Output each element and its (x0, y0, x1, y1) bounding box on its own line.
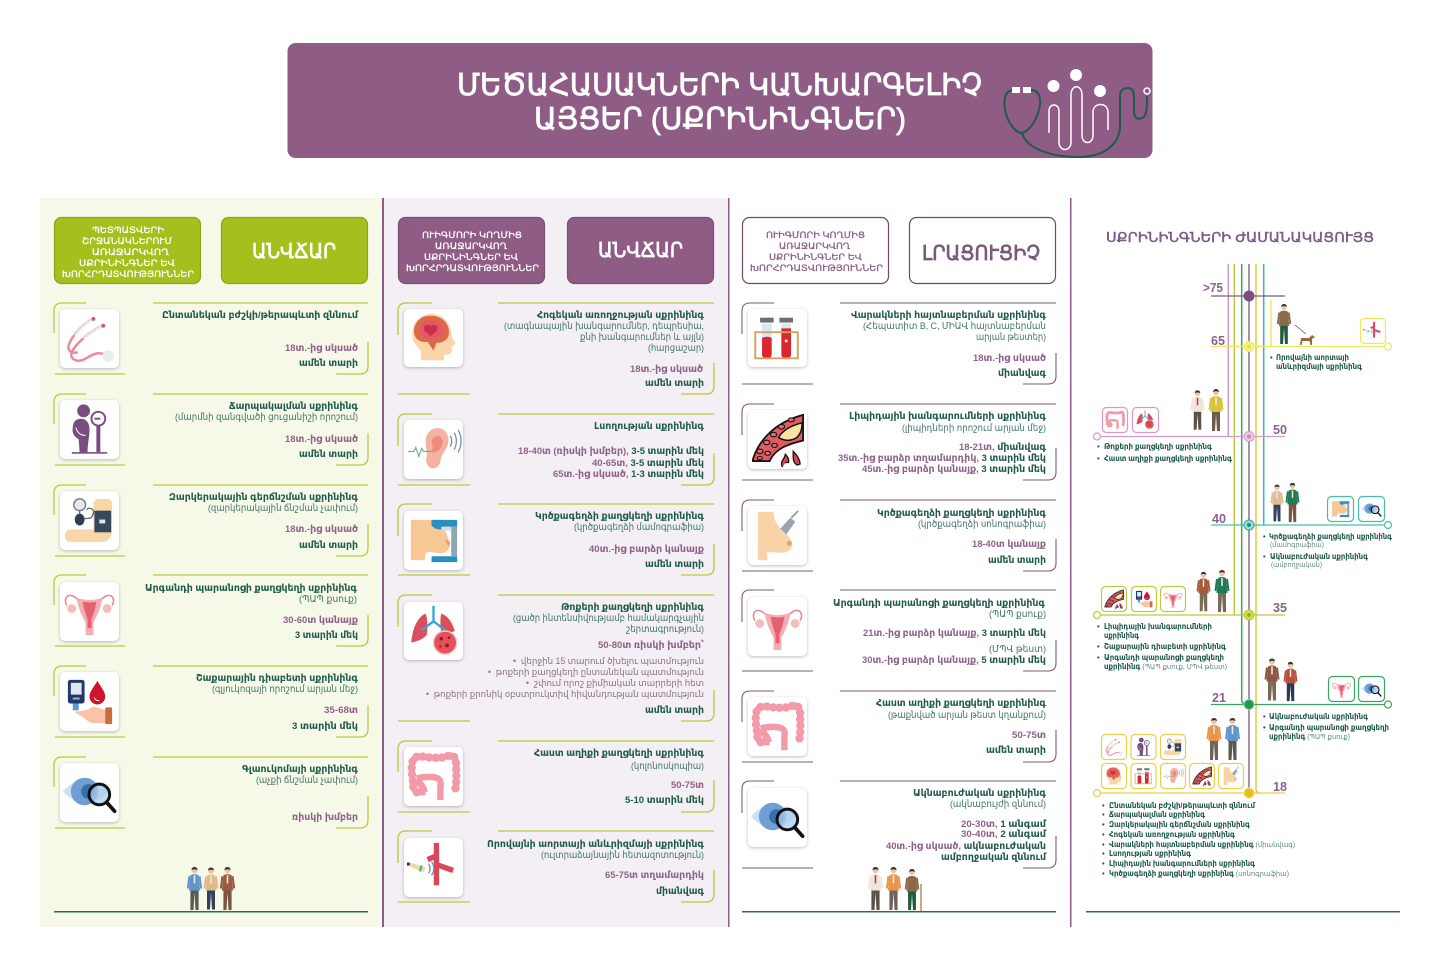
heading box: WHO recommended: ՍՔՐԻՆԻՆԳՆԵՐ ԵՎ (769, 252, 862, 262)
list: age 35 screenings: սքրինինգ (1104, 631, 1140, 640)
heading box: additional: ԼՐԱՑՈՒՑԻՉ (922, 243, 1040, 265)
text: breast cancer mammography: 40տ.-ից բարձր կանայք (589, 544, 704, 555)
icon: eye with magnifier (748, 788, 807, 847)
milestone: age 21 (1211, 658, 1392, 741)
list: age 35 screenings (1097, 622, 1227, 671)
text: family doctor exam (162, 310, 359, 369)
row: breast ultrasound (742, 500, 1056, 571)
heading box: state programs: ՊԵՏՊԱՏՎԵՐԻ (92, 225, 164, 235)
milestone: age 40: 40 (1212, 512, 1226, 526)
heading box: free: ԱՆՎՃԱՐ (252, 241, 336, 263)
text: abdominal aortic aneurysm: Որովայնի աորտայի անևրիզմայի սքրինինգ (487, 839, 704, 850)
text: abdominal aortic aneurysm: 65-75տ տղամարդիկ (605, 870, 704, 881)
text: ophthalmology: (ակնաբույժի զննում) (950, 798, 1046, 809)
milestone: age 50 (1094, 389, 1287, 463)
row: family doctor exam (54, 303, 368, 374)
icon: mammography box (1328, 496, 1354, 522)
text: diabetes: 3 տարին մեկ (292, 721, 358, 732)
milestone: over 75 (1203, 281, 1285, 302)
text: mental health: (տագնապային խանգարումներ, դեպրեսիա, (504, 320, 704, 331)
icon: blood pressure cuff (60, 491, 119, 550)
panel: header banner (288, 43, 1152, 158)
text: diabetes (196, 673, 358, 732)
list: age 18 screenings: • (1102, 820, 1105, 829)
chart: timeline vertical lines (1228, 264, 1271, 793)
text: colon cancer stool test: Հաստ աղիքի քաղցկեղի սքրինինգ (876, 698, 1046, 709)
icon: eye box (1358, 676, 1384, 702)
text: colon cancer stool test: ամեն տարի (986, 745, 1046, 756)
text: cervical cancer additional (833, 598, 1046, 666)
list: age 50 screenings: Թոքերի քաղցկեղի սքրինինգ (1104, 442, 1213, 451)
list: age 35 screenings: • (1097, 653, 1100, 662)
list: age 18 screenings: Ընտանեկան բժշկի/թերապևտի զննում (1109, 801, 1256, 810)
text: ophthalmology: 20-30տ, 1 անգամ (961, 819, 1047, 830)
icon: blood test tubes (748, 309, 807, 367)
text: colon cancer colonoscopy: Հաստ աղիքի քաղցկեղի սքրինինգ (534, 748, 704, 759)
text: abdominal aortic aneurysm (487, 839, 704, 897)
text: colon cancer stool test: (թաքնված արյան թեստ կղանքում) (888, 709, 1046, 720)
title: ՄԵԾԱՀԱՍԱԿՆԵՐԻ ԿԱՆԽԱՐԳԵԼԻՉ (457, 69, 982, 102)
row: cervical cancer (54, 575, 368, 646)
text: lipid disorders: 35տ.-ից բարձր տղամարդիկ, 3 տարին մեկ (838, 453, 1046, 464)
row: lipid disorders (742, 404, 1056, 480)
list: age 65 screenings (1270, 353, 1363, 371)
text: colon cancer colonoscopy: (կոլոնոսկոպիա) (631, 760, 704, 771)
list: age 21 screenings: • (1263, 723, 1266, 732)
text: hearing: 40-65տ, 3-5 տարին մեկ (592, 458, 704, 469)
list: age 40 screenings (1263, 532, 1393, 569)
list: age 18 screenings (1102, 801, 1295, 878)
heading box: free (222, 218, 368, 284)
text: lung cancer: Թոքերի քաղցկեղի սքրինինգ (561, 602, 704, 613)
list: age 40 screenings: Կրծքագեղձի քաղցկեղի սքրինինգ (1269, 532, 1393, 541)
text: hypertension: ամեն տարի (299, 540, 358, 551)
list: age 50 screenings: • (1097, 454, 1100, 463)
heading box: WHO recommended: ՍՔՐԻՆԻՆԳՆԵՐ ԵՎ (424, 252, 518, 262)
list: age 18 screenings: • (1102, 801, 1105, 810)
text: breast cancer mammography: ամեն տարի (645, 559, 704, 570)
heading box: WHO recommended (742, 218, 888, 284)
row: hypertension (54, 485, 368, 556)
heading box: WHO recommended: ՈՒԻԳՄՈՐԻ ԿՈՂՄԻՑ (766, 230, 865, 240)
illustration: two adults (1266, 658, 1297, 701)
text: hypertension: Զարկերակային գերճնշման սքրինինգ (169, 492, 358, 503)
icon: stethoscope (60, 309, 119, 368)
panel: screening timeline (1086, 230, 1400, 912)
text: lung cancer: • վերջին 15 տարում ծխելու պատմություն (513, 656, 704, 666)
text: obesity: ամեն տարի (299, 449, 358, 460)
text: infections (851, 310, 1046, 379)
row: mental health (398, 303, 714, 394)
list: age 35 screenings: • (1097, 622, 1100, 631)
text: breast ultrasound: 18-40տ կանայք (972, 539, 1046, 550)
row: obesity (54, 394, 368, 465)
list: age 18 screenings: • (1102, 859, 1105, 868)
text: breast cancer mammography: Կրծքագեղձի քաղցկեղի սքրինինգ (535, 511, 704, 522)
heading box: WHO recommended: ԱՌԱՋԱՐԿՎՈՂ (435, 241, 507, 251)
list: age 35 screenings: Շաքարային դիաբետի սքրինինգ (1104, 642, 1227, 651)
icon: uterus box (1328, 676, 1354, 702)
text: cervical cancer additional: (ՄՊՎ թեստ) (989, 643, 1046, 654)
text: ophthalmology: Ակնաբուժական սքրինինգ (913, 788, 1046, 799)
icon: blocked artery (748, 410, 807, 469)
text: cervical cancer additional: Արգանդի պարանոցի քաղցկեղի սքրինինգ (833, 598, 1045, 609)
heading box: WHO recommended: ԱՌԱՋԱՐԿՎՈՂ (779, 241, 850, 251)
panel: additional screenings recommended by WHO (742, 198, 1072, 927)
text: colon cancer stool test (876, 698, 1046, 756)
list: age 35 screenings: սքրինինգ (ՊԱՊ քսուք, ՄՊՎ թեստ) (1104, 662, 1227, 671)
row: colon cancer stool test (742, 691, 1056, 762)
illustration: elder walking dog (1278, 304, 1315, 345)
illustration: three adults including elder (869, 867, 921, 911)
list: age 18 screenings: • (1102, 810, 1105, 819)
icon: eye box (1358, 496, 1384, 522)
row: cervical cancer additional (742, 590, 1056, 671)
text: hearing (518, 421, 704, 480)
text: breast cancer mammography (535, 511, 704, 570)
text: hypertension (169, 492, 358, 551)
text: breast ultrasound (877, 508, 1046, 566)
text: cervical cancer (145, 583, 358, 641)
list: age 65 screenings: • (1270, 353, 1273, 362)
illustration: two adults (1197, 570, 1228, 612)
text: family doctor exam: Ընտանեկան բժշկի/թերապևտի զննում (162, 310, 359, 321)
list: age 21 screenings: Արգանդի պարանոցի քաղցկեղի (1269, 723, 1389, 732)
title (457, 69, 982, 136)
milestone: age 18 (1094, 718, 1295, 878)
list: age 18 screenings: Ճարպակալման սքրինինգ (1109, 810, 1206, 819)
heading box: state programs: ՇՐՋԱՆԱԿՆԵՐՈՒՄ (82, 236, 173, 246)
text: lung cancer (426, 602, 704, 716)
icon: lungs (404, 602, 463, 660)
list: age 18 screenings: Լսողության սքրինինգ (1109, 849, 1192, 858)
panel: free screenings in state-funded programs (40, 198, 384, 927)
text: hearing: Լսողության սքրինինգ (594, 421, 704, 432)
milestone: age 65 (1211, 304, 1392, 371)
text: infections: արյան թեստեր) (976, 331, 1046, 342)
text: infections: Վարակների հայտնաբերման սքրինինգ (851, 310, 1046, 321)
list: age 18 screenings: • (1102, 840, 1105, 849)
milestone: over 75: >75 (1203, 281, 1223, 295)
icon: colon box (1102, 408, 1128, 432)
list: age 35 screenings: Արգանդի պարանոցի քաղցկեղի (1104, 653, 1224, 662)
milestone: age 35 (1094, 570, 1287, 671)
text: abdominal aortic aneurysm: (ուլտրաձայնային հետազոտություն) (541, 849, 704, 860)
heading box: WHO recommended: ԽՈՐՀՐԴԱՏՎՈՒԹՅՈՒՆՆԵՐ (750, 263, 883, 273)
text: obesity: Ճարպակալման սքրինինգ (229, 401, 358, 412)
list: age 21 screenings: սքրինինգ (ՊԱՊ քսուք) (1269, 732, 1350, 741)
list: age 18 screenings: Կրծքագեղձի քաղցկեղի սքրինինգ (սոնոգրաֆիա) (1109, 869, 1289, 878)
text: glaucoma: (աչքի ճնշման չափում) (256, 774, 358, 785)
milestone: age 21: 21 (1212, 691, 1226, 705)
list: age 18 screenings: Զարկերակային գերճնշման սքրինինգ (1109, 820, 1251, 829)
list: age 35 screenings: Լիպիդային խանգարումների (1104, 622, 1212, 631)
text: infections: միանվագ (998, 368, 1046, 379)
text: cervical cancer additional: (ՊԱՊ քսուք) (989, 608, 1046, 619)
icon: glucose meter (60, 672, 119, 731)
row: hearing (398, 414, 714, 485)
text: infections: 18տ.-ից սկսած (973, 353, 1046, 364)
milestone: age 18: 18 (1273, 780, 1287, 794)
text: colon cancer stool test: 50-75տ (1012, 730, 1046, 741)
text: colon cancer colonoscopy (534, 748, 704, 806)
list: age 65 screenings: անևրիզմայի սքրինինգ (1276, 362, 1363, 371)
text: hearing: 65տ.-ից սկսած, 1-3 տարին մեկ (553, 469, 704, 480)
list: age 40 screenings: • (1263, 532, 1266, 541)
icon: aorta box (1360, 318, 1386, 344)
icon: uterus box (1160, 586, 1186, 612)
list: age 50 screenings: • (1097, 442, 1100, 451)
list: age 21 screenings: Ակնաբուժական սքրինինգ (1269, 712, 1369, 721)
list: age 18 screenings: Լիպիդային խանգարումների սքրինինգ (1109, 859, 1256, 868)
heading box: additional (910, 218, 1056, 284)
text: diabetes: Շաքարային դիաբետի սքրինինգ (196, 673, 358, 684)
heading box: state programs: ԱՌԱՋԱՐԿՎՈՂ (92, 247, 169, 257)
heading box: free (568, 218, 714, 284)
list: age 21 screenings: • (1263, 712, 1266, 721)
milestone: age 50: 50 (1273, 423, 1287, 437)
text: family doctor exam: 18տ.-ից սկսած (285, 343, 358, 354)
text: breast cancer mammography: (կրծքագեղձի մամոգրաֆիա) (574, 521, 704, 532)
text: lung cancer: (ցածր ինտենսիվությամբ համակարգչային (513, 612, 704, 623)
text: hypertension: 18տ.-ից սկսած (285, 524, 358, 535)
text: cervical cancer: 30-60տ կանայք (283, 615, 358, 626)
list: age 18 screenings: Վարակների հայտնաբերման սքրինինգ (միանվագ) (1109, 840, 1295, 849)
text: breast ultrasound: Կրծքագեղձի քաղցկեղի սքրինինգ (877, 508, 1046, 519)
text: mental health: (հարցաշար) (648, 342, 704, 353)
list: age 18 screenings: Հոգեկան առողջության սքրինինգ (1109, 830, 1236, 839)
list: age 40 screenings: Ակնաբուժական սքրինինգ (1270, 552, 1369, 561)
row: infections (742, 303, 1056, 384)
text: obesity: 18տ.-ից սկսած (285, 434, 358, 445)
icon: aorta with ultrasound probe (404, 838, 463, 897)
milestone: age 35: 35 (1273, 601, 1287, 615)
text: cervical cancer additional: 21տ.-ից բարձր կանայք, 3 տարին մեկ (863, 628, 1046, 639)
list: age 40 screenings: • (1263, 552, 1266, 561)
text: lung cancer: • շփում որոշ քիմիական տարրերի հետ (526, 678, 704, 688)
text: lipid disorders: (լիպիդների որոշում արյան մեջ) (902, 422, 1046, 433)
list: age 50 screenings (1097, 442, 1233, 463)
icon: colon (748, 697, 807, 756)
row: ophthalmology (742, 781, 1056, 868)
list: age 35 screenings: • (1097, 642, 1100, 651)
text: obesity: (մարմնի զանգվածի ցուցանիշի որոշում) (175, 411, 358, 422)
heading box: free: ԱՆՎՃԱՐ (598, 240, 683, 262)
list: age 65 screenings: Որովայնի աորտայի (1276, 353, 1349, 362)
text: mental health: 18տ.-ից սկսած (630, 364, 703, 375)
list: age 18 screenings: • (1102, 830, 1105, 839)
text: cervical cancer: (ՊԱՊ քսուք) (299, 593, 357, 604)
heading box: state programs: ՍՔՐԻՆԻՆԳՆԵՐ ԵՎ (79, 258, 175, 268)
icons: age 18 screening boxes (1102, 734, 1244, 788)
row: glaucoma (54, 757, 368, 828)
row: abdominal aortic aneurysm (398, 831, 714, 902)
list: age 50 screenings: Հաստ աղիքի քաղցկեղի սքրինինգ (1104, 454, 1233, 463)
illustration: two adults (1271, 483, 1299, 522)
heading box: WHO recommended: ՈՒԻԳՄՈՐԻ ԿՈՂՄԻՑ (422, 230, 522, 240)
list: age 40 screenings: (մամոգրաֆիա) (1270, 540, 1324, 549)
text: hearing: 18-40տ (ռիսկի խմբեր), 3-5 տարին մեկ (518, 446, 704, 457)
text: colon cancer colonoscopy: 50-75տ (671, 780, 704, 791)
icon: weight scale (60, 400, 119, 459)
text: ophthalmology (886, 788, 1047, 863)
icon: glucose box (1132, 586, 1156, 612)
icon: stethoscope with people (1004, 69, 1150, 157)
text: lipid disorders (838, 411, 1046, 475)
icon: uterus (748, 597, 807, 656)
milestone: age 65: 65 (1211, 334, 1225, 348)
heading box: state programs: ԽՈՐՀՐԴԱՏՎՈՒԹՅՈՒՆՆԵՐ (62, 269, 194, 279)
text: abdominal aortic aneurysm: միանվագ (656, 886, 704, 897)
text: lung cancer: • թոքերի քրոնիկ օբստրուկտիվ հիվանդության պատմություն (426, 689, 704, 699)
icon: head with brain (404, 309, 463, 367)
text: lipid disorders: 18-21տ, միանվագ (959, 442, 1046, 453)
heading box: WHO recommended: ԽՈՐՀՐԴԱՏՎՈՒԹՅՈՒՆՆԵՐ (406, 263, 539, 273)
text: glaucoma: ռիսկի խմբեր (292, 812, 358, 823)
row: breast cancer mammography (398, 504, 714, 575)
text: mental health: քնի խանգարումներ և այլն) (580, 331, 704, 342)
icon: mammography (404, 511, 463, 570)
text: lipid disorders: Լիպիդային խանգարումների սքրինինգ (849, 411, 1046, 422)
list: age 40 screenings: (ամբողջական) (1271, 560, 1322, 569)
illustration: two adults (1208, 718, 1239, 760)
text: ophthalmology: 40տ.-ից սկսած, ակնաբուժական (886, 841, 1046, 852)
text: hypertension: (զարկերակային ճնշման չափում) (208, 502, 358, 513)
icon: uterus (60, 582, 119, 641)
text: ophthalmology: 30-40տ, 2 անգամ (961, 829, 1047, 840)
text: lung cancer: 50-80տ ռիսկի խմբեր՝ (598, 638, 704, 651)
text: colon cancer colonoscopy: 5-10 տարին մեկ (625, 795, 704, 806)
text: breast ultrasound: ամեն տարի (988, 555, 1046, 566)
list: age 18 screenings: • (1102, 869, 1105, 878)
text: infections: (Հեպատիտ B, C, ՄԻԱՎ հայտնաբերման (863, 320, 1046, 331)
list: age 21 screenings (1263, 712, 1389, 741)
text: glaucoma (242, 764, 358, 823)
text: mental health: Հոգեկան առողջության սքրինինգ (537, 310, 704, 321)
icon: eye with magnifier (60, 763, 119, 822)
icon: lungs box (1132, 408, 1158, 432)
icon: artery box (1102, 586, 1126, 612)
text: diabetes: 35-68տ (324, 705, 358, 716)
text: lung cancer: • թոքերի քաղցկեղի ընտանեկան պատմություն (488, 667, 704, 677)
panel: free screenings recommended by WHO (384, 198, 730, 927)
heading: screening timetable: ՍՔՐԻՆԻՆԳՆԵՐԻ ԺԱՄԱՆԱԿԱՑՈՒՅՑ (1106, 230, 1374, 245)
text: diabetes: (գլյուկոզայի որոշում արյան մեջ) (212, 683, 358, 694)
row: colon cancer colonoscopy (398, 741, 714, 812)
icon: colon (404, 747, 463, 806)
text: ophthalmology: ամբողջական զննում (941, 852, 1047, 863)
text: glaucoma: Գլաուկոմայի սքրինինգ (242, 764, 358, 775)
text: cervical cancer: 3 տարին մեկ (295, 630, 358, 641)
row: diabetes (54, 666, 368, 737)
row: lung cancer (398, 595, 714, 721)
text: breast ultrasound: (կրծքագեղձի սոնոգրաֆիա) (918, 518, 1046, 529)
milestone: age 40 (1211, 483, 1393, 569)
heading box: state programs (54, 218, 200, 284)
title: ԱՅՑԵՐ (ՍՔՐԻՆԻՆԳՆԵՐ) (534, 103, 906, 136)
text: family doctor exam: ամեն տարի (299, 358, 358, 369)
text: lipid disorders: 45տ.-ից բարձր կանայք, 3 տարին մեկ (862, 464, 1046, 475)
text: mental health: ամեն տարի (645, 378, 704, 389)
text: lung cancer: շերտագրություն) (626, 623, 704, 634)
icon: ear (404, 420, 463, 479)
text: cervical cancer additional: 30տ.-ից բարձր կանայք, 5 տարին մեկ (862, 655, 1046, 666)
text: obesity (175, 401, 358, 460)
icon: breast ultrasound (748, 506, 807, 565)
illustration: three adults (188, 867, 234, 910)
text: cervical cancer: Արգանդի պարանոցի քաղցկեղի սքրինինգ (145, 583, 357, 594)
list: age 18 screenings: • (1102, 849, 1105, 858)
text: mental health (504, 310, 704, 389)
illustration: two adults (1191, 389, 1222, 431)
text: lung cancer: ամեն տարի (645, 705, 704, 716)
heading box: WHO recommended (398, 218, 544, 284)
